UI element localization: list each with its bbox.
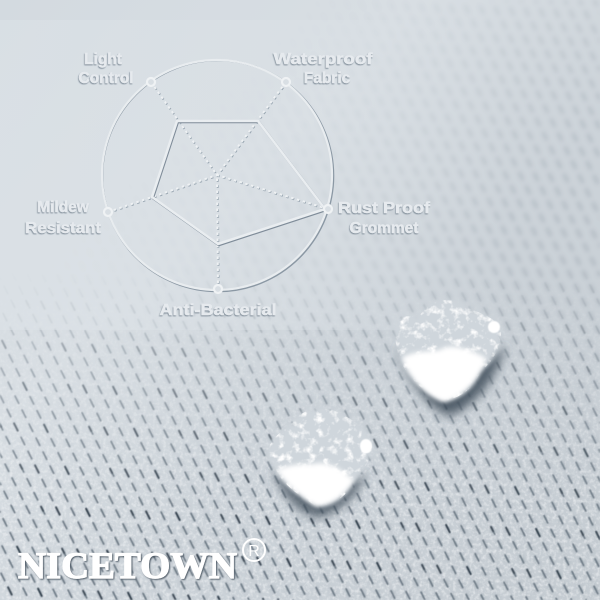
axis labels: Mildew <box>37 199 90 216</box>
dotted axes <box>108 82 329 290</box>
axis labels: Waterproof <box>274 51 374 68</box>
brand logo <box>18 539 265 587</box>
axis labels: Rust Proof <box>338 200 431 217</box>
axis labels: Light <box>84 51 122 68</box>
outer circle <box>102 60 333 291</box>
axis labels: Resistant <box>25 220 101 237</box>
water droplet: lower left <box>269 409 372 518</box>
registered mark <box>243 539 265 561</box>
radar chart <box>25 51 431 319</box>
axis labels <box>25 51 431 319</box>
axis labels: Fabric <box>304 70 351 87</box>
axis labels: Anti-Bacterial <box>160 302 276 319</box>
water droplet: upper right <box>395 300 506 416</box>
NICETOWN wordmark: NICETOWN <box>18 546 237 587</box>
axis labels: Grommet <box>350 220 418 237</box>
registered mark: R <box>248 543 260 560</box>
translucent chart panel <box>0 20 600 330</box>
axis labels: Control <box>78 70 134 87</box>
data polygon <box>152 121 326 245</box>
axis end markers <box>104 78 332 293</box>
